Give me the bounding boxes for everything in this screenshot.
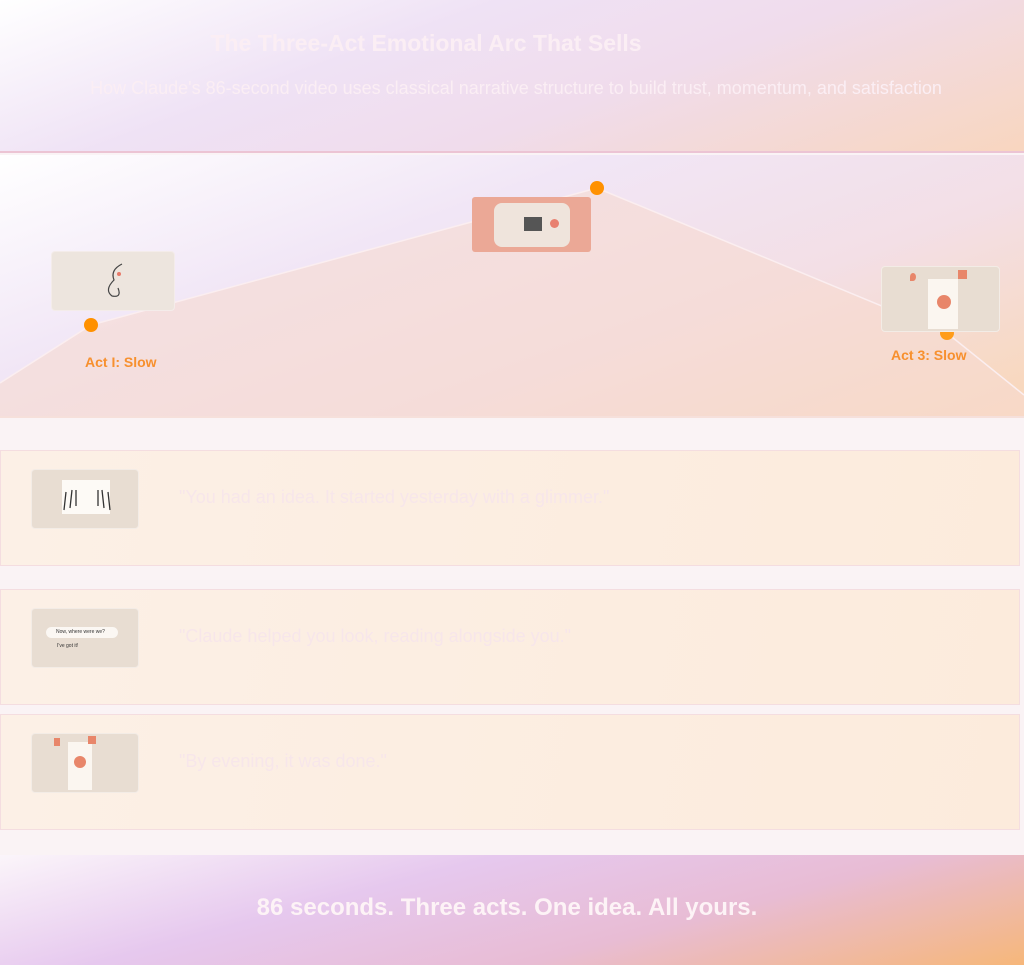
label: act 1: Act I: Slow [85, 354, 157, 370]
footer text: 86 seconds. Three acts. One idea. All yours. [257, 894, 757, 921]
quote: act 1: "You had an idea. It started yesterday with a glimmer." [179, 487, 609, 507]
arc chart [0, 181, 1024, 418]
panel: emotional arc chart [0, 155, 1024, 418]
quote: act 2: "Claude helped you look, reading alongside you." [179, 626, 571, 646]
header panel [0, 0, 1024, 153]
label: act 3: Act 3: Slow [891, 347, 966, 363]
thumbnail: act 3 [881, 266, 1000, 332]
row: act 1 [0, 450, 1020, 566]
row: act 2 [0, 589, 1020, 705]
row: act 3 [0, 714, 1020, 830]
thumbnail: hands [31, 469, 139, 529]
thumbnail: result [31, 733, 139, 793]
thumbnail: act 2 peak [472, 197, 591, 252]
thumbnail: chat [31, 608, 139, 668]
subtitle: How Claude's 86-second video uses classical narrative structure to build trust, momentum, and satisfaction [90, 78, 942, 98]
title: The Three-Act Emotional Arc That Sells [210, 30, 642, 56]
footer banner [0, 855, 1024, 965]
thumbnail: act 1 face [51, 251, 175, 311]
thumbnail: chat: I've got it! [57, 643, 78, 649]
quote: act 3: "By evening, it was done." [179, 751, 387, 771]
thumbnail: chat: Now, where were we? [56, 629, 105, 635]
